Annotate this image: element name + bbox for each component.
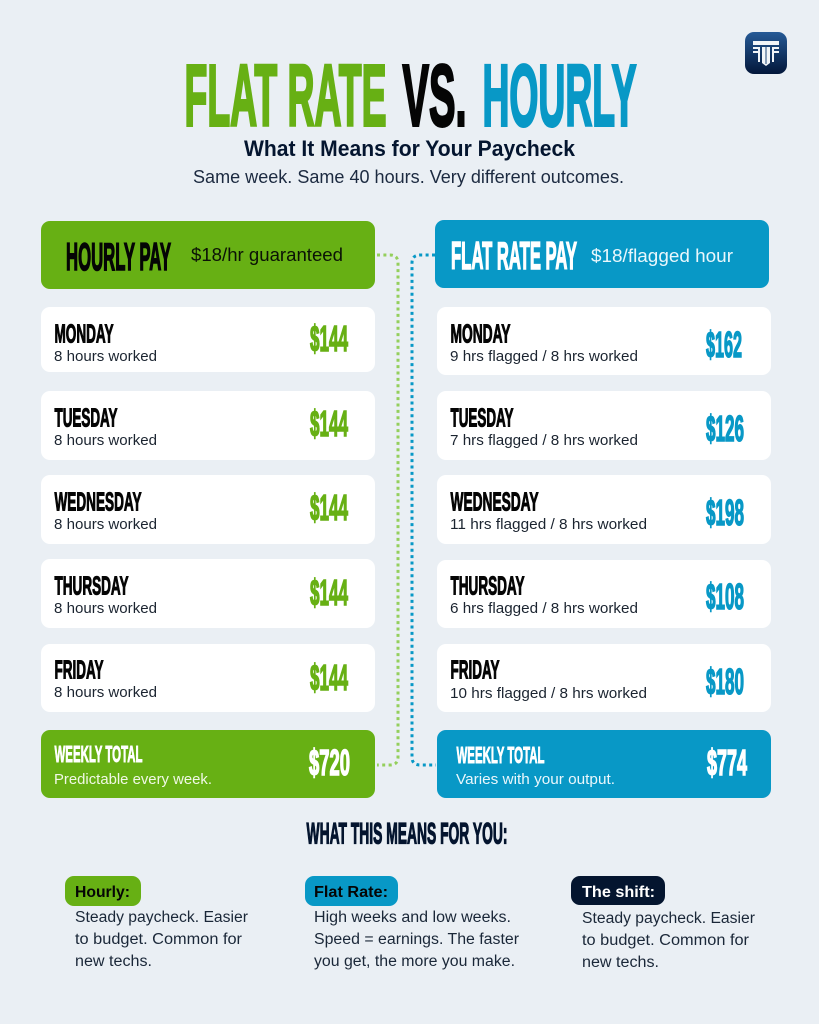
hourly monday row	[41, 307, 375, 372]
hourly header	[41, 221, 375, 289]
text: flat rate: you get, the more you make.	[314, 953, 515, 970]
hourly tuesday row: TUESDAY	[54, 402, 118, 432]
flat rate thursday row: 6 hrs flagged / 8 hrs worked	[450, 600, 638, 617]
hourly wednesday row: WEDNESDAY	[54, 486, 142, 516]
hourly weekly total	[41, 730, 375, 798]
flat rate thursday row: THURSDAY	[450, 570, 524, 600]
text: WHAT THIS MEANS FOR YOU:	[306, 818, 508, 850]
pill: flat rate: Flat Rate:	[314, 884, 388, 901]
flat rate wednesday row: WEDNESDAY	[450, 486, 538, 516]
flat rate tuesday row	[437, 391, 771, 460]
title: FLAT RATE	[184, 48, 386, 144]
takeaway: flat rate	[305, 876, 519, 970]
flat rate tuesday row: 7 hrs flagged / 8 hrs worked	[450, 432, 638, 449]
hourly weekly total: $720	[309, 742, 350, 783]
flat rate header: $18/flagged hour	[591, 246, 733, 266]
text: the shift: new techs.	[582, 954, 659, 971]
flat rate wednesday row	[437, 475, 771, 544]
connector: flat rate dotted line	[412, 255, 436, 765]
text: flat rate: Speed = earnings. The faster	[314, 931, 519, 948]
hourly tuesday row: 8 hours worked	[54, 432, 157, 449]
hourly tuesday row	[41, 391, 375, 460]
hourly thursday row: THURSDAY	[54, 570, 128, 600]
hourly monday row: MONDAY	[54, 318, 114, 348]
hourly header: HOURLY PAY	[66, 236, 171, 279]
flat rate thursday row: $108	[706, 576, 744, 617]
flat rate friday row: $180	[706, 661, 744, 702]
text: the shift: to budget. Common for	[582, 932, 749, 949]
hourly thursday row: $144	[310, 572, 348, 613]
hourly thursday row	[41, 559, 375, 628]
text: hourly: to budget. Common for	[75, 931, 242, 948]
hourly monday row: 8 hours worked	[54, 348, 157, 365]
hourly weekly total: Predictable every week.	[54, 771, 212, 788]
flat rate wednesday row: 11 hrs flagged / 8 hrs worked	[450, 516, 647, 533]
flat rate weekly total: Varies with your output.	[456, 771, 615, 788]
hourly wednesday row	[41, 475, 375, 544]
hourly friday row: $144	[310, 657, 348, 698]
pill: the shift	[571, 876, 665, 905]
hourly weekly total: WEEKLY TOTAL	[54, 741, 142, 767]
hourly header: $18/hr guaranteed	[191, 245, 343, 265]
text: hourly	[75, 909, 248, 970]
pill: hourly	[65, 876, 141, 906]
hourly monday row: $144	[310, 318, 348, 359]
flat rate weekly total	[437, 730, 771, 798]
takeaway: the shift	[571, 876, 755, 971]
flat rate weekly total: WEEKLY TOTAL	[456, 742, 544, 768]
text: the shift: Steady paycheck. Easier	[582, 910, 755, 927]
flat rate friday row: FRIDAY	[450, 654, 500, 684]
flat rate monday row: 9 hrs flagged / 8 hrs worked	[450, 348, 638, 365]
panel: flat rate pay	[435, 220, 771, 798]
flat rate header: FLAT RATE PAY	[451, 235, 577, 278]
hourly wednesday row: 8 hours worked	[54, 516, 157, 533]
pill: flat rate	[305, 876, 398, 906]
hourly tuesday row: $144	[310, 403, 348, 444]
hourly friday row: 8 hours worked	[54, 684, 157, 701]
flat rate weekly total: $774	[707, 742, 747, 783]
logo icon	[745, 32, 787, 74]
pill: the shift: The shift:	[582, 884, 655, 901]
flat rate wednesday row: $198	[706, 492, 744, 533]
connector: hourly dotted line	[377, 255, 398, 765]
hourly wednesday row: $144	[310, 487, 348, 528]
text: flat rate	[314, 909, 519, 970]
flat rate monday row	[437, 307, 771, 375]
flat rate friday row: 10 hrs flagged / 8 hrs worked	[450, 685, 647, 702]
flat rate thursday row	[437, 560, 771, 628]
flat rate monday row: $162	[706, 324, 742, 365]
flat rate header	[435, 220, 769, 288]
flat rate friday row	[437, 644, 771, 712]
takeaway: hourly	[65, 876, 248, 970]
text: the shift	[582, 910, 755, 971]
flat rate monday row: MONDAY	[450, 318, 510, 348]
flat rate tuesday row: $126	[706, 408, 744, 449]
text: hourly: new techs.	[75, 953, 152, 970]
title: VS.	[402, 48, 466, 144]
hourly friday row	[41, 644, 375, 712]
text: hourly: Steady paycheck. Easier	[75, 909, 248, 926]
subtitle: What It Means for Your Paycheck	[244, 136, 576, 161]
text: flat rate: High weeks and low weeks.	[314, 909, 511, 926]
flat rate tuesday row: TUESDAY	[450, 402, 514, 432]
hourly thursday row: 8 hours worked	[54, 600, 157, 617]
tagline: Same week. Same 40 hours. Very different outcomes.	[193, 167, 624, 187]
pill: hourly: Hourly:	[75, 884, 130, 901]
panel: hourly pay	[41, 221, 375, 798]
hourly friday row: FRIDAY	[54, 654, 104, 684]
